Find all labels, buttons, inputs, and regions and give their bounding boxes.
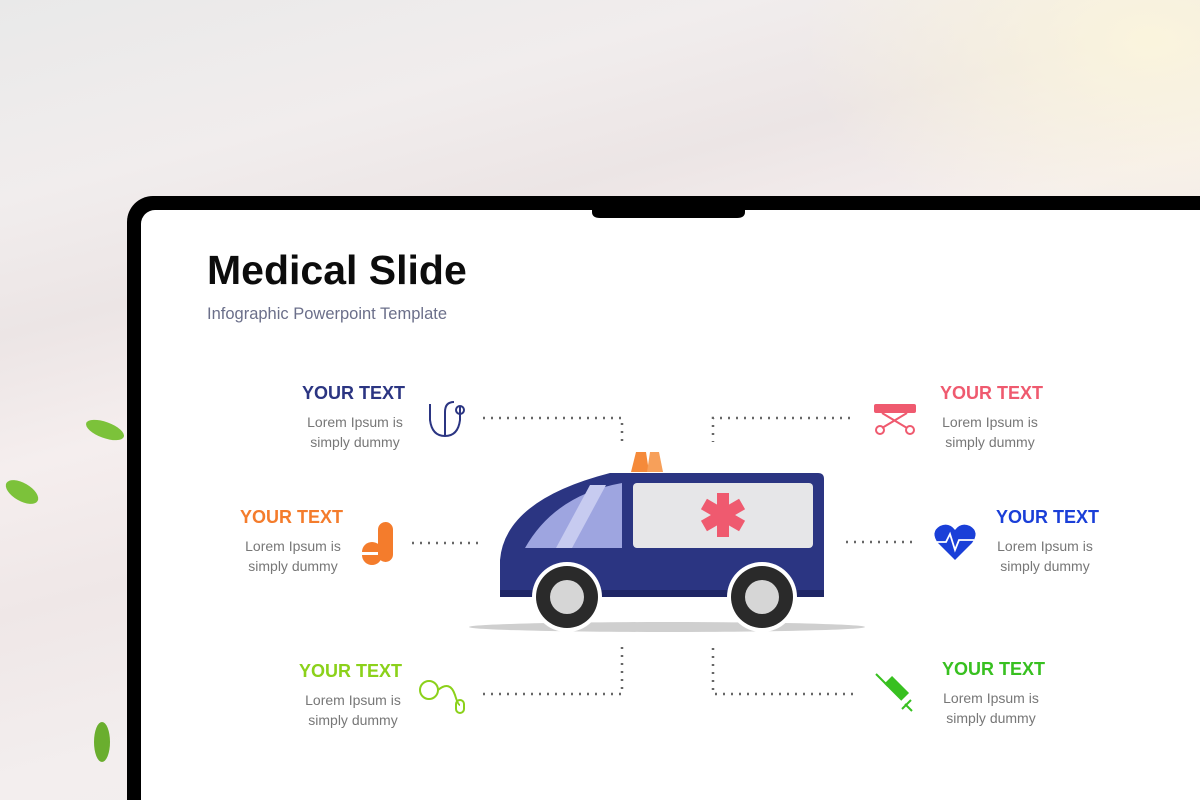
ambulance xyxy=(469,452,865,632)
item: right middle: Lorem Ipsum is xyxy=(997,538,1093,554)
icon: stretcher xyxy=(874,404,916,434)
icon: stethoscope xyxy=(430,402,464,436)
item: left middle: Lorem Ipsum is xyxy=(245,538,341,554)
title: Medical Slide xyxy=(207,247,467,293)
item: right bottom: YOUR TEXT xyxy=(942,659,1045,679)
icon: syringe xyxy=(876,674,912,711)
item: left middle: YOUR TEXT xyxy=(240,507,343,527)
item: left bottom xyxy=(299,661,464,728)
item: left middle xyxy=(240,507,393,574)
leaves xyxy=(2,416,127,762)
icon: pills xyxy=(362,522,393,565)
item: left top: Lorem Ipsum is xyxy=(307,414,403,430)
item: left bottom: simply dummy xyxy=(308,712,398,728)
item: right bottom: Lorem Ipsum is xyxy=(943,690,1039,706)
item: right top xyxy=(874,383,1043,450)
item: right middle: YOUR TEXT xyxy=(996,507,1099,527)
item: left top: simply dummy xyxy=(310,434,400,450)
item: right middle: simply dummy xyxy=(1000,558,1090,574)
item: left top: YOUR TEXT xyxy=(302,383,405,403)
item: right top: YOUR TEXT xyxy=(940,383,1043,403)
icon: blood pressure xyxy=(420,681,464,713)
subtitle: Infographic Powerpoint Template xyxy=(207,305,447,323)
item: right middle xyxy=(934,507,1099,574)
item: right bottom xyxy=(876,659,1045,726)
icon: heart xyxy=(934,525,976,560)
connectors xyxy=(412,418,918,694)
item: left top xyxy=(302,383,464,450)
device frame xyxy=(127,196,1200,800)
item: left bottom: Lorem Ipsum is xyxy=(305,692,401,708)
item: left bottom: YOUR TEXT xyxy=(299,661,402,681)
item: left middle: simply dummy xyxy=(248,558,338,574)
item: right bottom: simply dummy xyxy=(946,710,1036,726)
item: right top: simply dummy xyxy=(945,434,1035,450)
item: right top: Lorem Ipsum is xyxy=(942,414,1038,430)
